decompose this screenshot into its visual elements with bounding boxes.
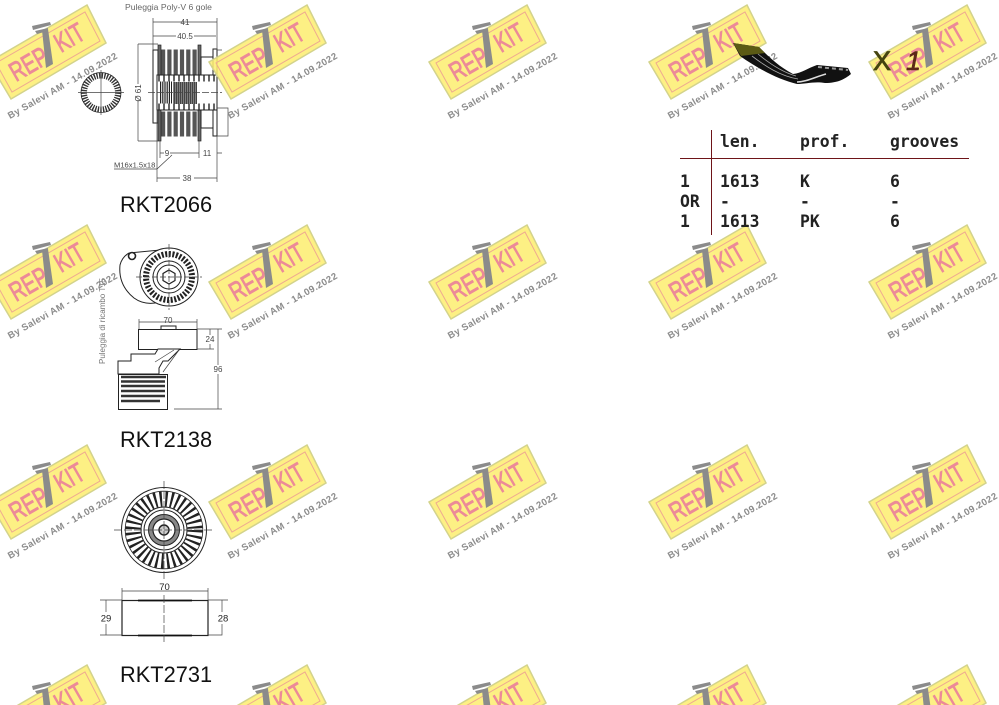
watermark stamp row 2 col 2: By Salevi AM - 14.09.2022 <box>226 271 339 342</box>
watermark stamp row 3 col 4: KIT <box>709 457 750 498</box>
watermark stamp row 1 col 3: KIT <box>489 17 530 58</box>
watermark stamp row 3 col 1: By Salevi AM - 14.09.2022 <box>6 491 119 562</box>
table row 1: K <box>800 172 810 191</box>
watermark stamp row 1 col 4 <box>649 5 779 122</box>
icon: pulley section view <box>148 45 222 141</box>
icon: tensioner front view <box>120 244 202 310</box>
dimension lines and values: 40.5 <box>177 32 193 41</box>
watermark stamp row 3 col 3 <box>429 445 559 562</box>
icon: tensioner side view <box>118 326 197 410</box>
table header: len. <box>720 132 759 151</box>
watermark stamp row 1 col 3 <box>429 5 559 122</box>
watermark stamp row 1 col 2 <box>209 5 339 122</box>
watermark stamp row 2 col 3: REP <box>444 261 494 307</box>
watermark stamp row 3 col 5: REP <box>884 481 934 527</box>
table header: grooves <box>890 132 959 151</box>
dimension lines and values: 11 <box>203 149 212 158</box>
watermark stamp row 4 col 1 <box>17 664 107 705</box>
watermark stamp row 1 col 2: REP <box>224 41 274 87</box>
watermark stamp row 3 col 2: By Salevi AM - 14.09.2022 <box>226 491 339 562</box>
watermark stamp row 1 col 2: By Salevi AM - 14.09.2022 <box>226 51 339 122</box>
watermark stamp row 1 col 3: By Salevi AM - 14.09.2022 <box>446 51 559 122</box>
watermark stamp row 2 col 4 <box>649 225 779 342</box>
table row 2 <box>680 212 900 231</box>
watermark stamp row 3 col 2: REP <box>224 481 274 527</box>
watermark stamp row 1 col 1: KIT <box>49 17 90 58</box>
drawing: tensioner RKT2138 <box>98 244 223 410</box>
watermark stamp row 1 col 1: By Salevi AM - 14.09.2022 <box>6 51 119 122</box>
watermark stamp row 2 col 1: By Salevi AM - 14.09.2022 <box>6 271 119 342</box>
table row OR <box>680 192 900 211</box>
drawing: alternator pulley RKT2066 <box>78 2 228 183</box>
watermark stamp row 1 col 4: REP <box>664 41 714 87</box>
table row 1: 1613 <box>720 172 759 191</box>
watermark stamp row 2 col 4: REP <box>664 261 714 307</box>
watermark stamp row 2 col 5: REP <box>884 261 934 307</box>
dimension lines and values: 38 <box>183 174 192 183</box>
drawing: idler pulley RKT2731 <box>100 481 228 642</box>
watermark stamp row 4 col 5 <box>897 664 987 705</box>
watermark stamp row 4 col 3 <box>457 664 547 705</box>
dimension lines and values: 28 <box>218 614 228 624</box>
watermark stamp row 2 col 1 <box>0 225 119 342</box>
watermark stamp row 3 col 2: KIT <box>269 457 310 498</box>
table row 2: PK <box>800 212 820 231</box>
watermark stamp row 1 col 4: KIT <box>709 17 750 58</box>
watermark stamp row 3 col 3: REP <box>444 481 494 527</box>
watermark stamp row 3 col 1: KIT <box>49 457 90 498</box>
multiplier: X 1: X <box>873 46 891 76</box>
table header <box>720 132 959 151</box>
watermark stamp row 3 col 4 <box>649 445 779 562</box>
watermark stamp row 2 col 3: KIT <box>489 237 530 278</box>
watermark stamp row 1 col 1 <box>0 5 119 122</box>
watermark stamp row 1 col 5: REP <box>884 41 934 87</box>
table row 2: 1613 <box>720 212 759 231</box>
dimension lines and values: 29 <box>101 614 111 624</box>
watermark stamp row 2 col 4: By Salevi AM - 14.09.2022 <box>666 271 779 342</box>
watermark stamp row 2 col 5: By Salevi AM - 14.09.2022 <box>886 271 999 342</box>
watermark stamp row 1 col 5: By Salevi AM - 14.09.2022 <box>886 51 999 122</box>
watermark stamp row 3 col 2 <box>209 445 339 562</box>
table: belt specifications <box>680 130 969 235</box>
watermark stamp row 3 col 5: KIT <box>929 457 970 498</box>
icon: idler side view <box>122 595 208 642</box>
dimension lines and values: 9 <box>165 149 170 158</box>
dimension lines and values: 70 <box>164 316 173 325</box>
watermark stamp row 1 col 5 <box>869 5 999 122</box>
table row 2: 6 <box>890 212 900 231</box>
label: RKT2138: RKT2138 <box>120 427 212 452</box>
watermark stamp row 3 col 3: KIT <box>489 457 530 498</box>
watermark stamp row 2 col 5 <box>869 225 999 342</box>
icon: poly-V belt <box>733 43 851 84</box>
watermark stamp row 2 col 3: By Salevi AM - 14.09.2022 <box>446 271 559 342</box>
multiplier: X 1: 1 <box>906 46 921 76</box>
icon: pulley front view <box>78 70 124 115</box>
watermark stamp row 2 col 2: REP <box>224 261 274 307</box>
dimension lines and values: 70 <box>159 582 170 593</box>
watermark stamp row 3 col 1: REP <box>4 481 54 527</box>
table row 1 <box>680 172 900 191</box>
watermark stamp row 1 col 1: REP <box>4 41 54 87</box>
label: RKT2066: RKT2066 <box>120 192 212 217</box>
label: RKT2731: RKT2731 <box>120 662 212 687</box>
watermark stamp row 3 col 4: By Salevi AM - 14.09.2022 <box>666 491 779 562</box>
dimension lines and values: 41 <box>181 18 190 27</box>
table row OR: - <box>720 192 730 211</box>
watermark stamp row 4 col 4 <box>677 664 767 705</box>
watermark stamp row 2 col 3 <box>429 225 559 342</box>
table row OR: OR <box>680 192 700 211</box>
watermark stamp row 1 col 2: KIT <box>269 17 310 58</box>
dimension lines and values: Ø 61 <box>134 84 143 102</box>
caption: spare pulley note: Puleggia di ricambo T15 <box>98 277 107 364</box>
watermark stamp row 3 col 4: REP <box>664 481 714 527</box>
dimension lines and values: 96 <box>214 365 223 374</box>
watermark stamp row 3 col 5: By Salevi AM - 14.09.2022 <box>886 491 999 562</box>
watermark stamp row 2 col 2 <box>209 225 339 342</box>
watermark stamp row 3 col 3: By Salevi AM - 14.09.2022 <box>446 491 559 562</box>
table row 1: 6 <box>890 172 900 191</box>
dimension lines and values <box>100 582 228 635</box>
watermark stamp row 1 col 5: KIT <box>929 17 970 58</box>
table row OR: - <box>890 192 900 211</box>
icon: idler front view <box>114 481 214 580</box>
watermark stamp row 2 col 5: KIT <box>929 237 970 278</box>
watermark stamp row 2 col 1: KIT <box>49 237 90 278</box>
watermark stamp row 1 col 3: REP <box>444 41 494 87</box>
table row 2: 1 <box>680 212 690 231</box>
dimension lines and values <box>139 316 223 409</box>
watermark stamp row 2 col 2: KIT <box>269 237 310 278</box>
dimension lines and values: M16x1.5x18 <box>114 160 155 170</box>
watermark stamp row 2 col 1: REP <box>4 261 54 307</box>
table row OR: - <box>800 192 810 211</box>
dimension lines and values <box>114 18 228 183</box>
table row 1: 1 <box>680 172 690 191</box>
multiplier: X 1 <box>873 46 921 76</box>
table header: prof. <box>800 132 849 151</box>
watermark stamp row 3 col 5 <box>869 445 999 562</box>
watermark stamp row 3 col 1 <box>0 445 119 562</box>
watermark stamp row 1 col 4: By Salevi AM - 14.09.2022 <box>666 51 779 122</box>
watermark stamp row 2 col 4: KIT <box>709 237 750 278</box>
watermark stamp row 4 col 2 <box>237 664 327 705</box>
caption: pulley type: Puleggia Poly-V 6 gole <box>125 2 212 12</box>
dimension lines and values: 24 <box>206 335 215 344</box>
